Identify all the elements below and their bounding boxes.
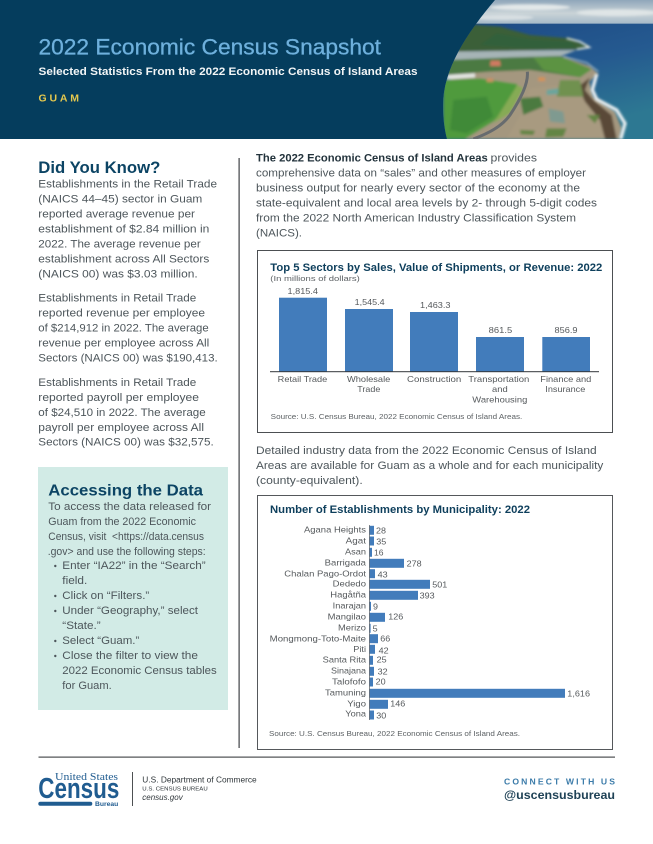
text block: revenue per employee: Establishments in Retail Trade [38,293,196,305]
municipality labels: Tamuning [325,689,366,698]
text block: instructions intro: To access the data released for [48,501,211,513]
category labels: Wholesale [347,375,391,384]
municipality labels: Agat [346,537,367,546]
logo: Census Bureau: United States [55,771,118,783]
value labels: 25 [377,656,387,665]
social media callout [504,776,615,802]
municipality labels: Dededo [333,580,367,589]
chart title: Number of Establishments by Municipality: 2022 [270,504,530,516]
text block: instructions intro: .gov> and use the following steps: [48,546,206,558]
list: steps: for Guam. [62,680,112,692]
header banner [0,0,653,139]
value labels: 20 [376,678,386,687]
bars [279,298,590,372]
text block: instructions intro: Census, visit <https://data.census [48,531,204,543]
municipality labels: Agana Heights [304,526,366,535]
list: steps: 2022 Economic Census tables [62,665,217,677]
social media callout: @uscensusbureau [504,788,615,802]
municipality labels: Merizo [338,624,367,633]
value labels: 32 [378,667,388,676]
heading: did you know: Did You Know? [38,158,160,177]
value labels: 43 [378,571,388,580]
municipality labels: Santa Rita [323,656,367,665]
title: 2022 Economic Census Snapshot [38,34,381,60]
list: steps: Under “Geography,” select [62,605,198,617]
department text: census.gov [142,793,184,802]
photo: Guam coastline [430,0,653,139]
footer [38,757,615,808]
logo: Census Bureau: Census [38,773,119,805]
value labels: 146 [390,700,406,709]
text block: introduction: business output for nearly every sector of the economy at the [256,182,580,194]
bar chart: establishments by municipality [258,496,612,750]
value labels: 501 [432,581,448,590]
text block: instructions intro [48,501,211,558]
text block: revenue per employee: revenue per employee across All [38,338,209,350]
list: steps [54,560,217,692]
text block: introduction: provides [490,152,538,164]
category labels: Transportation [468,375,529,384]
text block: average revenue per establishment: Establishments in the Retail Trade [38,179,217,191]
value labels: 35 [376,537,387,546]
value labels [373,527,591,721]
text block: introduction: state-equivalent and local area levels by 2- through 5-digit codes [256,197,598,209]
category labels: Insurance [545,385,586,394]
heading: accessing the data: Accessing the Data [48,483,203,500]
text block: introduction: from the 2022 North American Industry Classification System [256,212,576,224]
municipality labels [270,526,367,719]
value labels: 1,815.4 [288,287,319,296]
value labels: 1,616 [567,690,591,699]
municipality labels: Hagåtña [330,591,367,600]
municipality labels: Yigo [347,700,367,709]
text block: payroll per employee: of $24,510 in 2022. The average [38,407,206,419]
text block: introduction: comprehensive data on “sales” and other measures of employer [256,167,586,179]
text block: introduction: (NAICS). [256,227,302,239]
list: steps: “State.” [62,620,101,632]
list: steps: Close the filter to view the [62,650,198,662]
value labels: 856.9 [554,326,578,335]
text block: introduction: The 2022 Economic Census of Island Areas [256,152,488,164]
text block: average revenue per establishment: (NAICS 00) was $3.03 million. [38,269,198,281]
panel: did you know [38,158,218,449]
value labels [288,287,578,335]
value labels: 5 [373,625,378,634]
value labels: 1,463.3 [420,301,451,310]
value labels: 861.5 [489,326,513,335]
municipality labels: Piti [353,645,366,654]
text block: payroll per employee: payroll per employee across All [38,422,204,434]
list: steps: Select “Guam.” [62,635,140,647]
chart title: Top 5 Sectors by Sales, Value of Shipments, or Revenue: 2022 [270,262,602,274]
category labels: Construction [407,375,461,384]
text block: revenue per employee [38,293,218,365]
value labels: 126 [388,613,404,622]
category labels: Warehousing [472,396,527,405]
value labels: 9 [373,602,379,611]
municipality labels: Talofofo [332,678,367,687]
text block: payroll per employee: Sectors (NAICS 00) was $32,575. [38,437,214,449]
text block: detailed data note [256,445,604,487]
value labels: 278 [407,559,422,568]
municipality labels: Sinajana [331,667,367,676]
value labels: 16 [374,548,384,557]
value labels: 42 [379,646,389,655]
category labels: Retail Trade [278,375,328,384]
text block: payroll per employee [38,377,214,449]
value labels: 1,545.4 [355,298,385,307]
text block: detailed data note: (county-equivalent). [256,475,363,487]
text block: average revenue per establishment: establishment across All Sectors [38,254,210,266]
bar chart: top 5 sectors [258,250,612,432]
municipality labels: Barrigada [325,559,367,568]
category labels [278,375,591,405]
category labels: and [492,385,508,394]
text block: detailed data note: Areas are available for Guam as a whole and for each municipality [256,460,604,472]
logo: Census Bureau: Bureau [95,801,118,808]
list: steps: field. [62,575,87,587]
value labels: 66 [380,635,391,644]
text block: payroll per employee: reported payroll per employee [38,392,199,404]
department text [142,776,257,802]
municipality labels: Yona [345,710,367,719]
text block: average revenue per establishment: (NAICS 44–45) sector in Guam [38,194,202,206]
department text: U.S. CENSUS BUREAU [142,787,208,793]
text block: average revenue per establishment: establishment of $2.84 million in [38,224,209,236]
chart subtitle: (In millions of dollars) [270,274,360,283]
text block: revenue per employee: of $214,912 in 2022. The average [38,323,209,335]
text block: instructions intro: Guam from the 2022 Economic [48,516,196,528]
text block: payroll per employee: Establishments in Retail Trade [38,377,196,389]
category labels: Trade [357,385,381,394]
text block: introduction [256,152,598,239]
value labels: 30 [376,712,387,721]
municipality labels: Inarajan [333,602,366,611]
text block: revenue per employee: reported revenue per employee [38,308,205,320]
text block: average revenue per establishment [38,179,217,281]
value labels: 28 [376,527,387,536]
social media callout: CONNECT WITH US [504,776,615,786]
location label: GUAM [38,93,79,105]
list: steps: Enter “IA22” in the “Search” [62,560,206,572]
department text: U.S. Department of Commerce [142,776,257,785]
municipality labels: Asan [345,548,366,557]
text block: average revenue per establishment: 2022. The average revenue per [38,239,201,251]
text block: detailed data note: Detailed industry data from the 2022 Economic Census of Island [256,445,597,457]
municipality labels: Chalan Pago-Ordot [284,570,367,579]
municipality labels: Mangilao [328,613,367,622]
text block: average revenue per establishment: reported average revenue per [38,209,195,221]
municipality labels: Mongmong-Toto-Maite [270,635,367,644]
chart source: Source: U.S. Census Bureau, 2022 Economic Census of Island Areas. [269,729,520,738]
subtitle: Selected Statistics From the 2022 Economic Census of Island Areas [38,66,418,78]
text block: revenue per employee: Sectors (NAICS 00) was $190,413. [38,353,218,365]
category labels: Finance and [540,375,591,384]
list: steps: Click on “Filters.” [62,590,150,602]
chart source: Source: U.S. Census Bureau, 2022 Economic Census of Island Areas. [271,412,522,421]
value labels: 393 [420,591,435,600]
bars [369,526,565,720]
panel: accessing the data [38,467,228,710]
